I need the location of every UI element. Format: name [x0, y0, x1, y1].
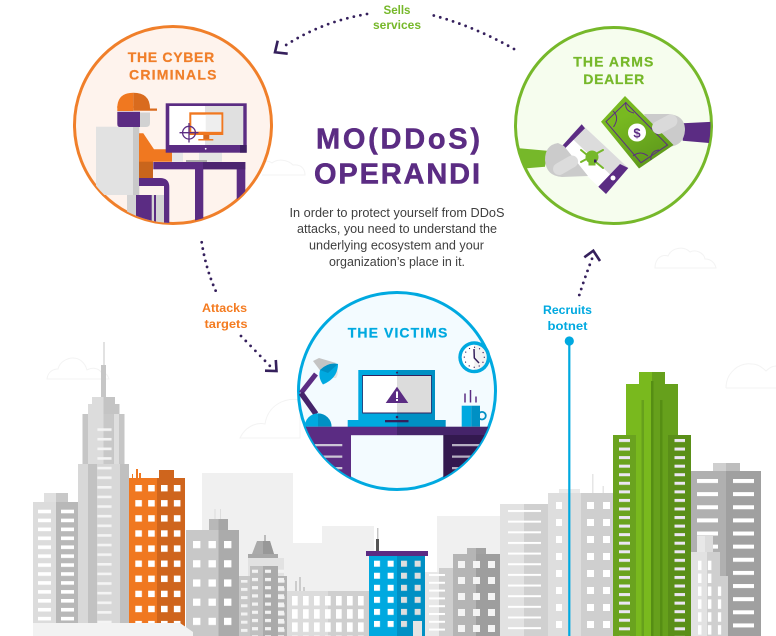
label: sells services: Sells: [384, 3, 411, 17]
heading: the cyber criminals: [128, 49, 216, 82]
building: small tower with cone roof: [239, 535, 287, 636]
title: MO(DDoS): [316, 124, 480, 156]
title: OPERANDI: [314, 158, 480, 190]
inner target monitor: [189, 112, 223, 140]
wall clock: [458, 341, 490, 373]
building: light grey windows block: [548, 474, 613, 636]
heading: the arms dealer: THE ARMS: [573, 54, 653, 70]
banknote: $: [633, 125, 641, 140]
clouds background: [47, 160, 776, 438]
intro text: organization’s place in it.: [329, 255, 465, 269]
intro text: In order to protect yourself from DDoS: [290, 206, 504, 220]
building: blue tower with purple roof: [366, 528, 428, 636]
label: attacks targets: Attacks: [202, 301, 247, 315]
label: recruits botnet: Recruits: [543, 303, 592, 317]
panel: the arms dealer: [516, 28, 713, 224]
illustration: phone and money exchange: [516, 96, 713, 194]
label: attacks targets: targets: [204, 317, 248, 331]
building: grey block with antennas: [186, 509, 239, 636]
label: sells services: services: [373, 18, 421, 32]
coffee mug: [462, 390, 486, 427]
building: mid grey block: [453, 548, 500, 636]
right thumb: [652, 114, 678, 134]
laptop with warning: [348, 370, 446, 427]
illustration: hacker at computer: [96, 93, 247, 225]
label: recruits botnet: [543, 303, 592, 333]
illustration: office desk: [299, 358, 488, 478]
desk lamp: [301, 358, 338, 427]
phone: [559, 124, 628, 194]
building: green skyscraper: [613, 372, 691, 636]
building: low light grey block: [287, 577, 369, 636]
intro text: attacks, you need to understand the: [297, 222, 497, 236]
banknote: [601, 96, 674, 168]
building: narrow striped block: [425, 568, 453, 636]
label: recruits botnet: botnet: [548, 319, 588, 333]
panel: the cyber criminals: [74, 26, 272, 225]
arrow: recruits botnet: [579, 251, 600, 295]
skull and crossbones: [581, 150, 603, 168]
label: attacks targets: [202, 301, 248, 331]
panel: the victims: [298, 292, 496, 495]
heading: the arms dealer: DEALER: [583, 71, 644, 87]
desk: [306, 426, 488, 478]
building: dark grey striped right: [691, 463, 761, 636]
right hand back: [644, 114, 685, 147]
heading: the victims: THE VICTIMS: [348, 324, 447, 340]
crosshair: [180, 123, 198, 142]
intro text: [290, 206, 504, 269]
building: grey skyscraper with spire: [78, 342, 129, 636]
building: grey striped left: [33, 493, 78, 636]
building: orange tower: [129, 469, 185, 636]
background skyline silhouettes: [202, 473, 500, 636]
heading: the arms dealer: [573, 54, 653, 87]
heading: the cyber criminals: CRIMINALS: [129, 66, 216, 82]
intro text: underlying ecosystem and your: [309, 238, 484, 252]
label: sells services: [373, 3, 421, 32]
recruit line with dot: [565, 336, 574, 636]
left hand: [545, 143, 588, 177]
heading: the cyber criminals: THE CYBER: [128, 49, 214, 65]
title: [314, 124, 480, 190]
arrow: sells services to cyber criminals: [275, 14, 514, 54]
arrow: attacks targets: [202, 242, 276, 371]
building: tall light striped: [500, 504, 548, 636]
ground strip: [33, 623, 193, 636]
building: small front tower: [691, 536, 728, 636]
